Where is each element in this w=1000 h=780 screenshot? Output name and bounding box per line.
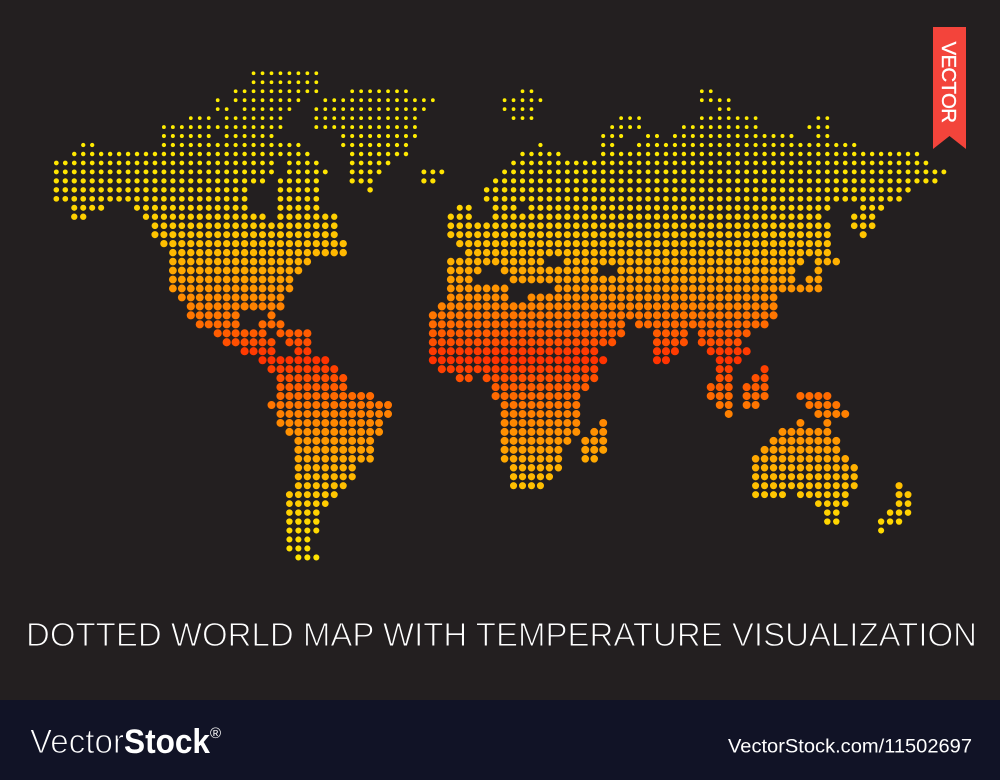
landmass: Svalbard: [505, 91, 541, 118]
landmass: Greenland: [316, 91, 433, 190]
landmass: Europe and Asia: [451, 91, 944, 414]
footer logo: VectorStock: ®: [210, 725, 221, 742]
landmass: Borneo and Philippines: [747, 369, 765, 405]
landmass: Madagascar: [585, 423, 603, 459]
footer band: [0, 700, 1000, 780]
footer logo: VectorStock: Stock: [124, 723, 210, 761]
landmass: Australia and New Guinea: [756, 396, 854, 522]
landmass: South America: [263, 360, 388, 557]
landmass: Africa: [433, 306, 594, 486]
footer logo: VectorStock: Vector: [30, 723, 124, 761]
ribbon badge: VECTOR: [933, 27, 966, 149]
footer logo: VectorStock: [30, 723, 221, 761]
landmass: Iceland: [424, 172, 442, 181]
ribbon badge: VECTOR: VECTOR: [937, 42, 960, 123]
landmass: North and Central America: [56, 73, 343, 351]
title: DOTTED WORLD MAP WITH TEMPERATURE VISUALIZATION: [26, 616, 977, 653]
landmass: New Zealand: [881, 486, 908, 531]
footer image id: VectorStock.com/11502697: [728, 736, 972, 758]
dotted world map: [56, 73, 944, 557]
